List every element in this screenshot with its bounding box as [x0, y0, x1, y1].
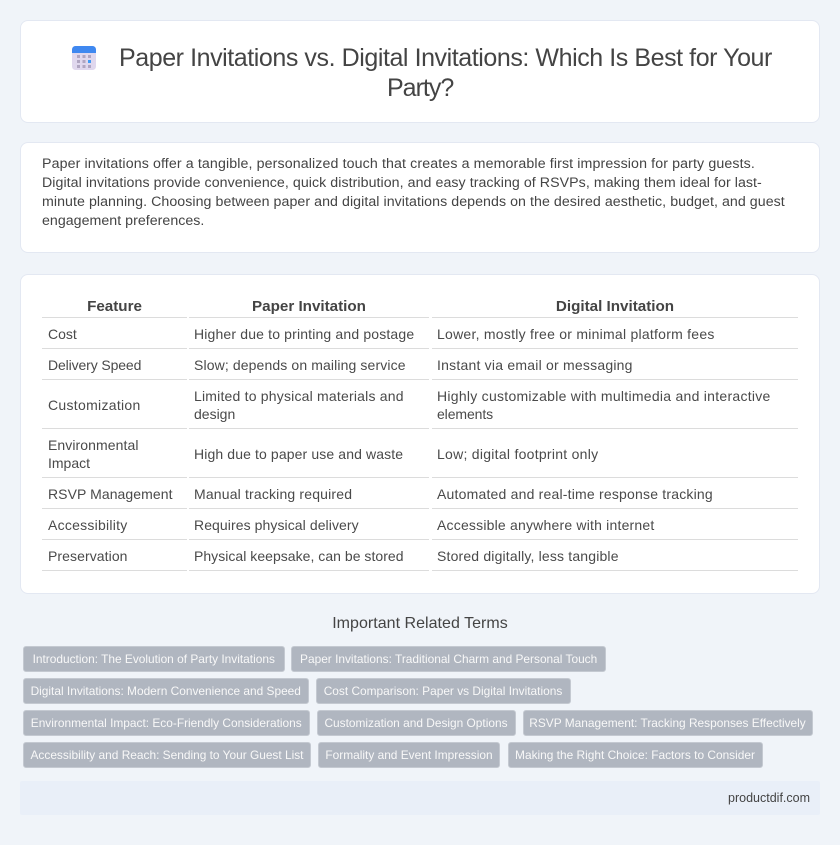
related terms tags: Accessibility and Reach: Sending to Your Guest List	[30, 748, 303, 762]
comparison table	[42, 298, 798, 571]
intro panel	[20, 142, 820, 253]
related terms tags: Cost Comparison: Paper vs Digital Invitations	[324, 684, 562, 698]
intro text: engagement preferences.	[42, 213, 204, 229]
comparison table: Highly customizable with multimedia and interactive	[437, 388, 771, 404]
related terms tags: Making the Right Choice: Factors to Consider	[515, 748, 755, 762]
related terms tags: Environmental Impact: Eco-Friendly Considerations	[31, 716, 302, 730]
related terms tags: RSVP Management: Tracking Responses Effectively	[529, 716, 806, 730]
related terms tags: Introduction: The Evolution of Party Invitations	[33, 652, 275, 666]
comparison table: Impact	[48, 455, 90, 471]
comparison table: Delivery Speed	[48, 357, 141, 373]
comparison table: elements	[437, 406, 493, 422]
footer bar: productdif.com	[728, 791, 810, 805]
comparison table: Digital Invitation	[556, 298, 674, 315]
related terms tags: Digital Invitations: Modern Convenience and Speed	[31, 684, 301, 698]
comparison table: High due to paper use and waste	[194, 446, 403, 462]
icon: calendar	[72, 46, 96, 70]
comparison table: Lower, mostly free or minimal platform fees	[437, 326, 715, 342]
comparison table: Manual tracking required	[194, 486, 352, 502]
related terms tags: Paper Invitations: Traditional Charm and Personal Touch	[300, 652, 597, 666]
comparison table: design	[194, 406, 235, 422]
header panel	[20, 20, 820, 123]
comparison table: Environmental	[48, 437, 139, 453]
comparison table: Higher due to printing and postage	[194, 326, 414, 342]
comparison table: Cost	[48, 326, 77, 342]
intro text: minute planning. Choosing between paper and digital invitations depends on the desired aesthetic, budget, and guest	[42, 194, 785, 210]
comparison table: Limited to physical materials and	[194, 388, 404, 404]
intro text: Paper invitations offer a tangible, personalized touch that creates a memorable first impression for party guests.	[42, 156, 755, 172]
title: Paper Invitations vs. Digital Invitations: Which Is Best for Your	[119, 44, 772, 72]
comparison table: Instant via email or messaging	[437, 357, 633, 373]
comparison table: Automated and real-time response tracking	[437, 486, 713, 502]
comparison table: Preservation	[48, 548, 128, 564]
title	[119, 44, 772, 102]
related terms tags	[23, 646, 813, 768]
related terms tags: Customization and Design Options	[324, 716, 508, 730]
comparison table: Requires physical delivery	[194, 517, 359, 533]
comparison table: RSVP Management	[48, 486, 173, 502]
comparison table: Accessible anywhere with internet	[437, 517, 654, 533]
related terms heading: Important Related Terms	[332, 615, 508, 632]
title: Party?	[387, 74, 453, 102]
comparison table: Customization	[48, 397, 141, 413]
comparison table: Accessibility	[48, 517, 128, 533]
intro text: Digital invitations provide convenience, quick distribution, and easy tracking of RSVPs, making them ideal for last-	[42, 175, 762, 191]
footer bar	[20, 781, 820, 815]
comparison table: Feature	[87, 298, 142, 315]
table panel	[20, 274, 820, 594]
comparison table: Paper Invitation	[252, 298, 366, 315]
intro text	[42, 156, 785, 229]
comparison table: Low; digital footprint only	[437, 446, 598, 462]
comparison table: Physical keepsake, can be stored	[194, 548, 404, 564]
related terms tags: Formality and Event Impression	[325, 748, 493, 762]
comparison table: Slow; depends on mailing service	[194, 357, 406, 373]
comparison table: Stored digitally, less tangible	[437, 548, 619, 564]
